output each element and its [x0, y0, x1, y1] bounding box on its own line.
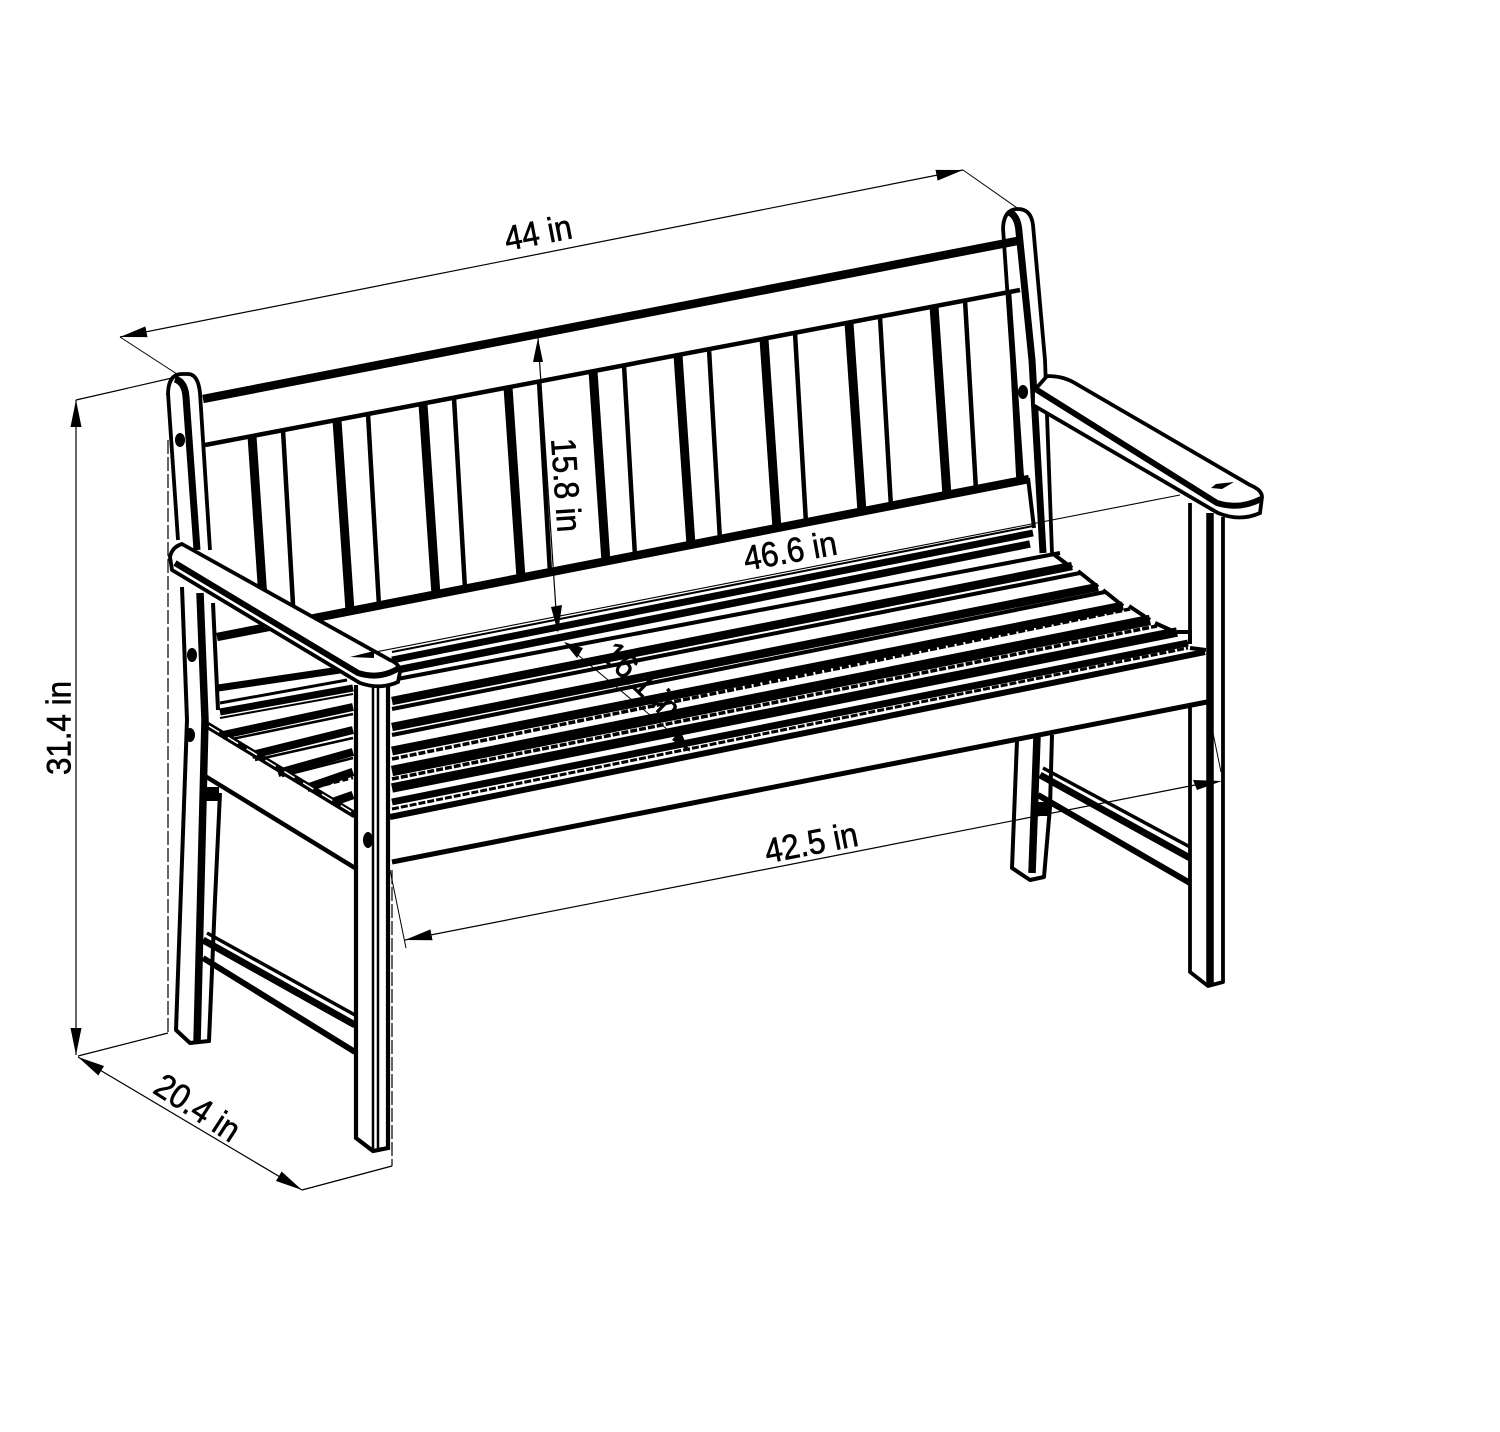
bolts — [175, 385, 1028, 848]
dimension: 15.8 in: 15.8 in — [543, 437, 588, 533]
rear right post and leg — [1003, 209, 1052, 880]
dimension: 31.4 in — [40, 378, 172, 1056]
top rail — [203, 241, 1020, 445]
right armrest — [1033, 376, 1262, 518]
left armrest — [170, 544, 400, 686]
dimension: 44 in: 44 in — [501, 208, 575, 259]
bench backrest — [203, 241, 1034, 637]
dimension: 15.8 in — [533, 338, 588, 633]
slat end steps — [1052, 553, 1206, 650]
seat side rail — [205, 725, 355, 868]
front right post — [1190, 503, 1223, 986]
rear left post and leg — [168, 374, 220, 1043]
front left post — [356, 684, 388, 1151]
dimension: 16.1 in — [564, 634, 690, 752]
dimension: 16.1 in: 16.1 in — [594, 634, 688, 728]
dimension: 20.4 in — [78, 870, 392, 1190]
dimension: 31.4 in: 31.4 in — [40, 681, 79, 775]
seat slats left of front post — [218, 670, 353, 802]
lower back rail — [217, 478, 1034, 637]
seat front rail lower edge — [392, 702, 1207, 862]
dimension: 20.4 in: 20.4 in — [147, 1066, 247, 1150]
dimension: 44 in — [120, 170, 1020, 376]
dimension: 42.5 in — [390, 733, 1222, 948]
bench seat — [205, 526, 1207, 868]
seat slats right of front post — [390, 526, 1205, 817]
dimension: 42.5 in: 42.5 in — [761, 816, 861, 872]
rear lower stretcher, right — [1038, 768, 1190, 883]
dimension: 46.6 in: 46.6 in — [741, 524, 840, 579]
rear lower stretcher, left — [203, 933, 355, 1052]
backrest slats — [252, 292, 1022, 628]
dimension: 46.6 in — [360, 495, 1180, 655]
